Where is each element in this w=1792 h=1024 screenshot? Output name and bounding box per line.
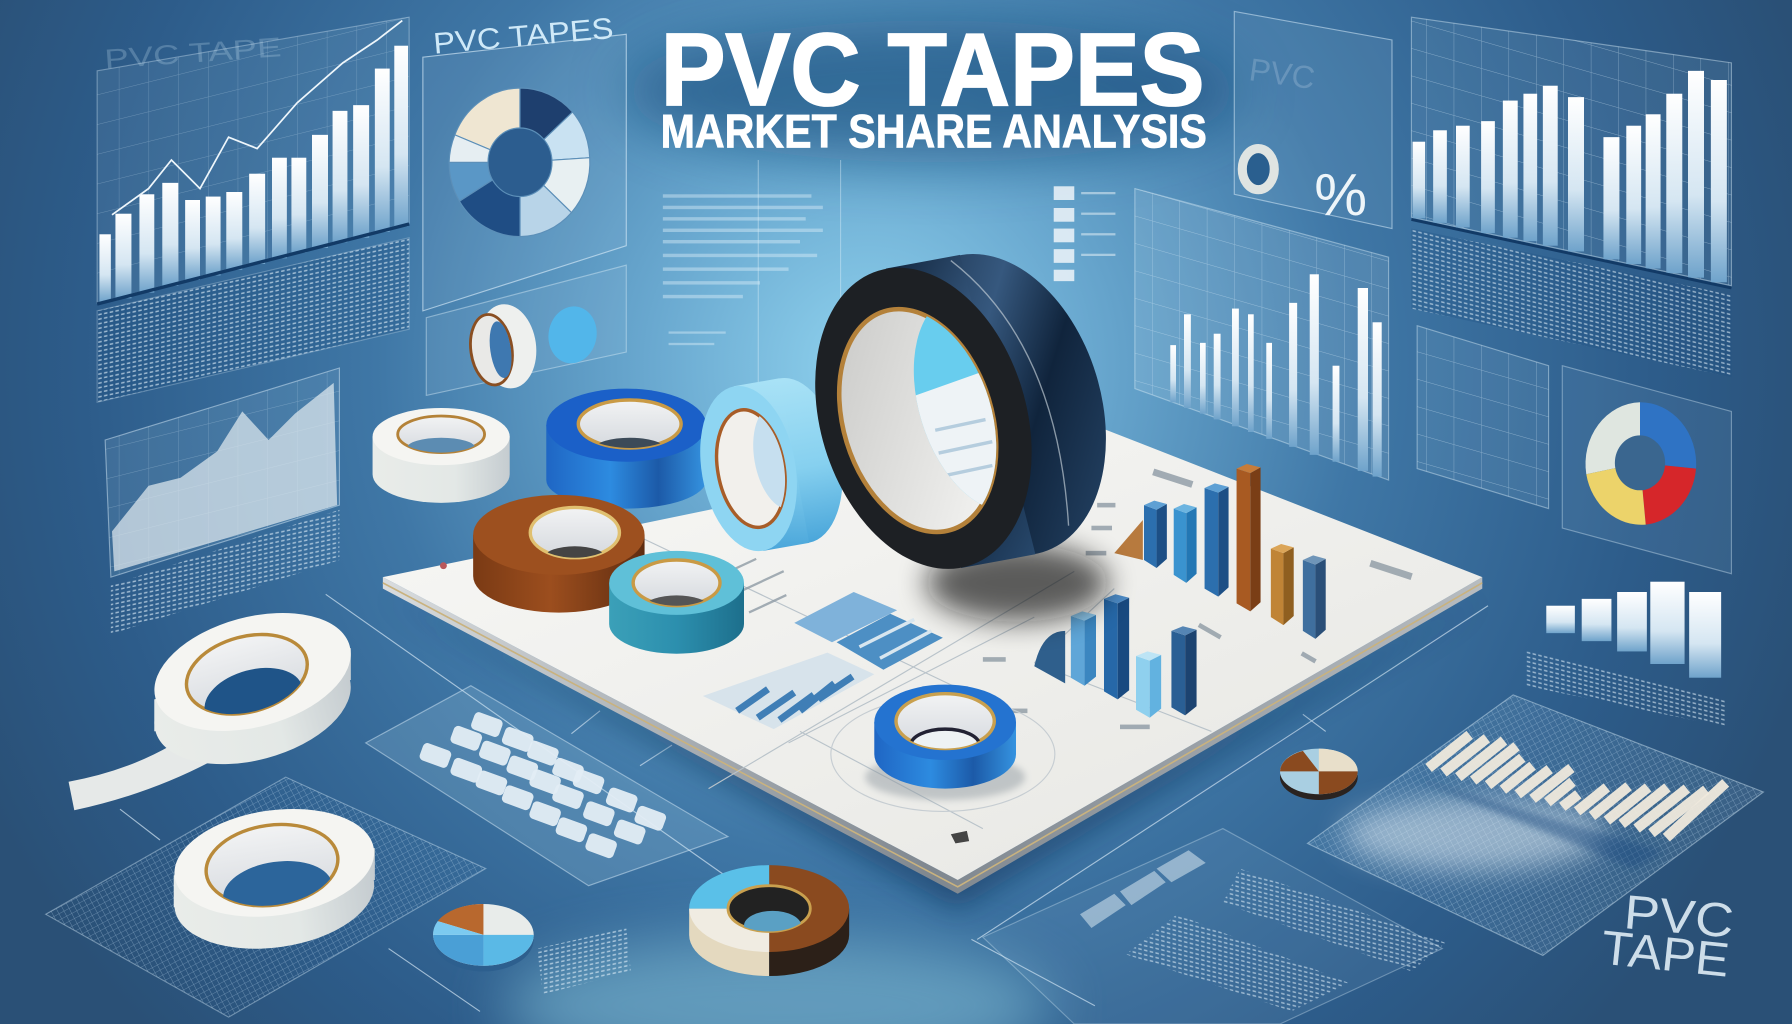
bars	[1413, 71, 1727, 282]
seam	[951, 261, 1069, 526]
diagonal stripes	[1429, 735, 1726, 838]
baseline	[97, 224, 409, 304]
texture: lower right strip	[1526, 649, 1726, 727]
bar chart: sheet lower	[1034, 594, 1197, 718]
connector lines	[120, 594, 1488, 1011]
panel: pie chart card	[1562, 366, 1731, 574]
panel: percent card	[1234, 11, 1392, 229]
core	[728, 886, 810, 931]
circle guide	[831, 697, 1055, 811]
tape: white	[373, 408, 510, 503]
label: PVC TAPE: PVC	[1622, 886, 1736, 949]
panel: lower centre glass card	[983, 829, 1446, 1024]
bar 1	[1071, 611, 1096, 686]
sheet surface	[383, 429, 1482, 880]
text rows	[714, 469, 1413, 729]
icon: ring	[1242, 149, 1274, 190]
bars	[99, 46, 408, 302]
panel: top right bar chart	[1411, 17, 1731, 288]
shadow: black tape	[926, 544, 1109, 622]
title line 1: PVC TAPES	[661, 12, 1205, 127]
core view	[914, 316, 996, 505]
area	[112, 383, 337, 571]
core	[813, 290, 1022, 552]
blue thumbnails	[703, 592, 943, 729]
sheet gold line	[383, 583, 1482, 887]
core	[177, 622, 316, 727]
core view	[753, 416, 786, 508]
trend line	[112, 21, 402, 215]
faint label: PVC TAPE	[103, 31, 282, 75]
bar 5	[1271, 544, 1294, 625]
icon: small white tape	[466, 300, 542, 392]
label: PVC TAPE	[1599, 886, 1736, 988]
title	[661, 12, 1207, 157]
panel: donut chart	[423, 12, 626, 311]
core	[708, 404, 794, 533]
core	[578, 400, 681, 448]
red dot	[440, 562, 447, 569]
tape: white with tail	[68, 613, 351, 810]
panel: central data table	[663, 160, 841, 389]
tape: sky blue upright	[700, 378, 842, 552]
tape: teal	[609, 551, 744, 654]
corner mark	[951, 831, 969, 843]
bar chart: sheet upper	[1114, 464, 1326, 639]
texture: patch beside pie	[537, 928, 631, 994]
texture: top right dots	[1411, 229, 1731, 377]
panel: left rising bar chart	[97, 17, 409, 304]
pills	[418, 711, 667, 859]
bar 6	[1303, 555, 1326, 639]
bar 2	[1174, 504, 1197, 583]
title line 2: MARKET SHARE ANALYSIS	[661, 105, 1207, 157]
sheet dividers	[640, 537, 1211, 829]
texture: left data strip	[97, 238, 409, 402]
tape: blue	[546, 389, 706, 509]
bar 1	[1144, 501, 1167, 568]
core	[398, 416, 485, 453]
title glow	[623, 21, 1240, 162]
bar 4	[1237, 464, 1261, 611]
pie: lower left	[433, 904, 534, 971]
document: sheet	[383, 429, 1482, 909]
donut	[449, 88, 590, 237]
texture: left data dots	[97, 238, 409, 402]
list: small rows	[1054, 186, 1115, 281]
sheet edge	[383, 577, 1482, 894]
core	[530, 507, 619, 558]
donut	[1585, 402, 1696, 525]
tape: brown	[473, 495, 645, 613]
panel: pill grid	[366, 686, 728, 886]
bar 3	[1136, 651, 1161, 718]
bar 4	[1171, 626, 1197, 715]
texture: top right data strip	[1411, 229, 1731, 377]
core	[633, 560, 720, 606]
label: PVC TAPE: TAPE	[1599, 922, 1732, 988]
tape: black large	[815, 254, 1106, 569]
panel: area chart	[105, 368, 339, 577]
bar 2	[1104, 594, 1129, 699]
bars	[1170, 274, 1382, 477]
panel: small tape card	[426, 265, 626, 395]
dotted strip upper	[1223, 869, 1446, 971]
faint heading: PVC	[1247, 51, 1317, 96]
dotted strip lower	[1126, 914, 1349, 1011]
percent sign: %	[1314, 161, 1367, 228]
bar chart: lower right	[1546, 582, 1721, 678]
panel heading: PVC TAPES	[432, 12, 615, 61]
core	[896, 694, 994, 749]
tape: blue on sheet	[865, 685, 1025, 800]
pie: small	[1280, 749, 1358, 800]
panel: mesh lower left	[46, 777, 486, 1017]
donut: lower centre	[689, 865, 849, 976]
cloud shape	[1343, 798, 1606, 871]
panel: central right bar chart	[1135, 189, 1389, 480]
baseline	[1411, 219, 1731, 288]
dark band	[1411, 777, 1663, 869]
stripes	[1080, 850, 1206, 928]
texture: lower left strip	[111, 510, 339, 634]
tape: white lower	[174, 809, 375, 949]
core	[201, 816, 343, 914]
panel: grid card	[1417, 326, 1549, 509]
icon: blue disc	[544, 303, 601, 367]
panel: glass wave chart	[1307, 695, 1763, 955]
bar 3	[1205, 483, 1229, 597]
background glow lower centre	[503, 937, 1051, 1024]
